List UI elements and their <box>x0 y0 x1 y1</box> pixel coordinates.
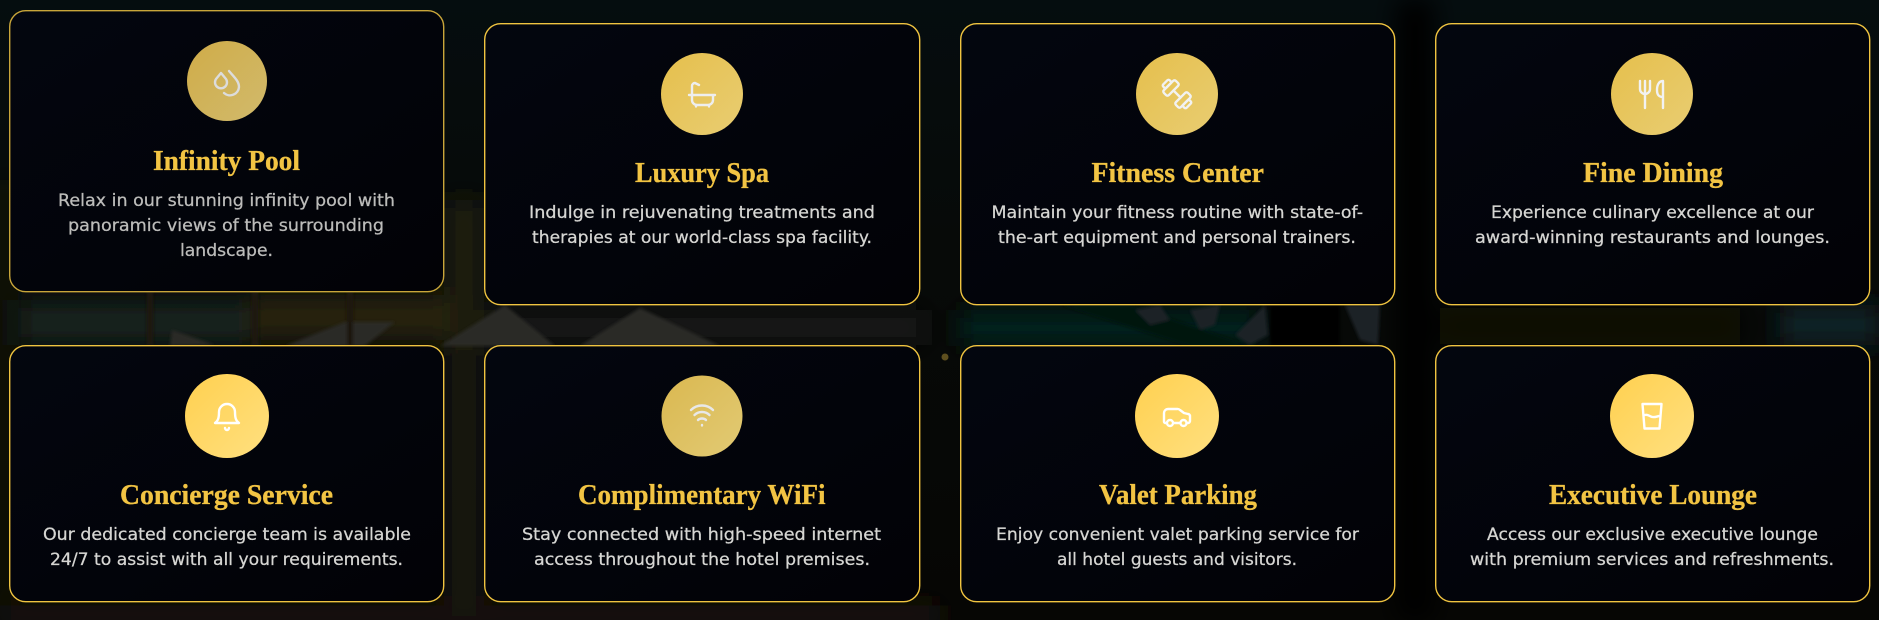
heading: Fine Dining <box>1583 158 1723 189</box>
description <box>996 525 1359 569</box>
description <box>529 203 875 247</box>
description: Our dedicated concierge team is available <box>43 525 411 544</box>
icon: bell <box>185 374 269 458</box>
description <box>522 525 882 569</box>
icon: dumbbell <box>1136 53 1218 135</box>
panel: Valet Parking <box>961 346 1395 602</box>
description: with premium services and refreshments. <box>1470 550 1834 569</box>
description: Stay connected with high-speed internet <box>522 525 882 544</box>
icon: bathtub <box>661 53 743 135</box>
description: landscape. <box>180 241 273 260</box>
description: access throughout the hotel premises. <box>534 550 870 569</box>
heading: Concierge Service <box>120 480 333 511</box>
description: 24/7 to assist with all your requirements. <box>50 550 403 569</box>
icon: fork and knife <box>1611 53 1693 135</box>
description <box>43 525 411 569</box>
description: Experience culinary excellence at our <box>1491 203 1814 222</box>
heading: Infinity Pool <box>153 146 300 177</box>
panel: Fitness Center <box>961 24 1395 305</box>
panel: Fine Dining <box>1436 24 1870 305</box>
description: Indulge in rejuvenating treatments and <box>529 203 875 222</box>
panel: Executive Lounge <box>1436 346 1870 602</box>
description: Relax in our stunning infinity pool with <box>58 191 395 210</box>
description: Maintain your fitness routine with state-of- <box>992 203 1363 222</box>
icon: water drops <box>187 41 267 121</box>
description <box>58 191 395 260</box>
description <box>992 203 1363 247</box>
panel: Infinity Pool <box>10 11 444 292</box>
description <box>1475 203 1830 247</box>
heading: Complimentary WiFi <box>578 480 826 511</box>
icon: car <box>1135 374 1219 458</box>
heading: Luxury Spa <box>635 158 769 189</box>
panel: Concierge Service <box>10 346 444 602</box>
description: Enjoy convenient valet parking service for <box>996 525 1359 544</box>
description: panoramic views of the surrounding <box>68 216 384 235</box>
description: therapies at our world-class spa facility. <box>532 228 872 247</box>
carousel dot <box>942 354 948 360</box>
panel: Luxury Spa <box>485 24 920 305</box>
heading: Fitness Center <box>1092 158 1264 189</box>
heading: Executive Lounge <box>1549 480 1757 511</box>
heading: Valet Parking <box>1099 480 1257 511</box>
description: award-winning restaurants and lounges. <box>1475 228 1830 247</box>
description: Access our exclusive executive lounge <box>1487 525 1818 544</box>
panel: Complimentary WiFi <box>485 346 920 602</box>
description: all hotel guests and visitors. <box>1057 550 1297 569</box>
icon: water glass <box>1610 374 1694 458</box>
description <box>1470 525 1834 569</box>
icon: wifi <box>662 376 742 456</box>
description: the-art equipment and personal trainers. <box>998 228 1356 247</box>
